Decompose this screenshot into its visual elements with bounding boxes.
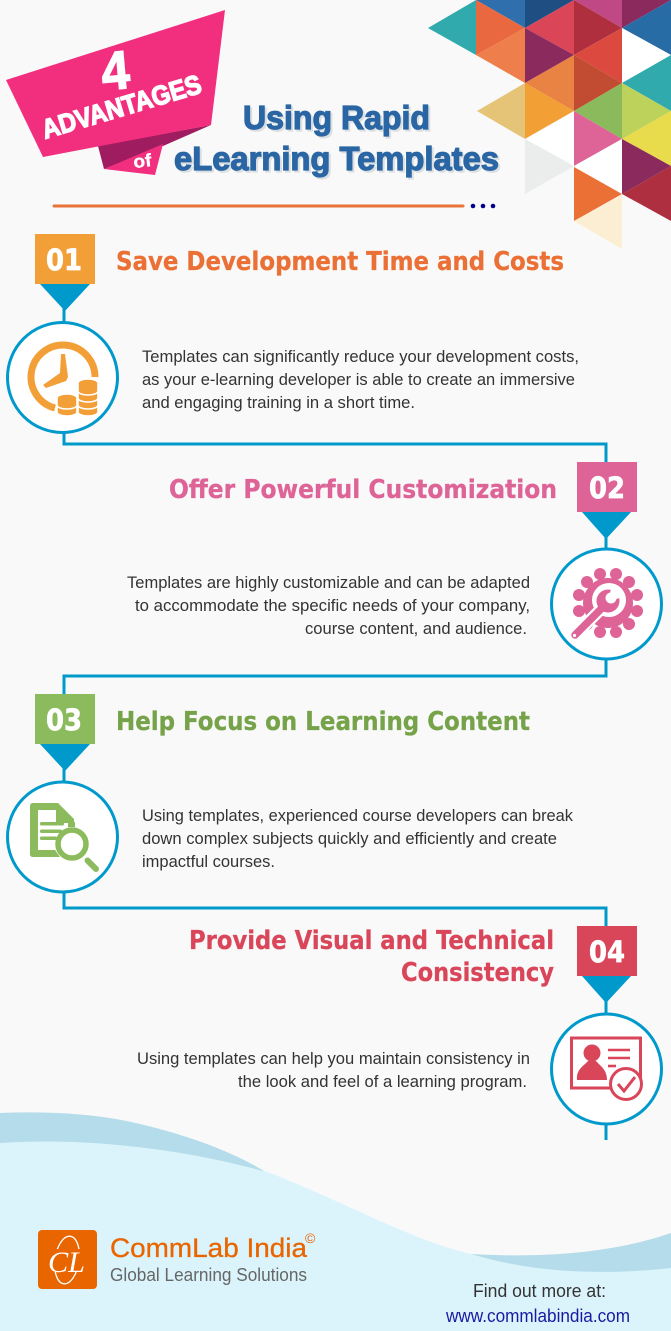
step 4 — [137, 926, 662, 1124]
number badge 03 — [35, 694, 95, 771]
find out more: www.commlabindia.com — [445, 1306, 630, 1326]
title: eLearning Templates — [176, 142, 501, 179]
title — [174, 99, 501, 179]
body text 4 — [137, 1049, 530, 1091]
icon: id card with check — [552, 1014, 662, 1124]
body text 4: the look and feel of a learning program. — [238, 1072, 527, 1091]
number badge 01 — [35, 234, 95, 311]
body text 3: down complex subjects quickly and efficiently and create — [142, 829, 557, 848]
body text 3 — [142, 806, 573, 871]
timeline connector — [64, 300, 606, 1140]
number badge 04 — [577, 926, 637, 1003]
title: Using Rapid — [243, 99, 430, 136]
number badge 02: 02 — [589, 471, 625, 505]
numeral 4: 4 — [99, 40, 132, 102]
banner main — [6, 10, 225, 157]
banner: 4 advantages of — [6, 10, 225, 175]
number badge 04: 04 — [589, 935, 625, 969]
heading 4: Provide Visual and Technical — [189, 926, 554, 956]
step 1 — [8, 234, 579, 432]
title divider with dots — [54, 204, 495, 208]
number badge 01: 01 — [46, 243, 82, 277]
heading 3: Help Focus on Learning Content — [116, 707, 530, 737]
body text 3: Using templates, experienced course developers can break — [142, 806, 573, 825]
body text 1: Templates can significantly reduce your development costs, — [142, 347, 579, 366]
body text 2: Templates are highly customizable and can be adapted — [127, 573, 530, 592]
icon: clock and coins — [8, 322, 118, 432]
logo tagline: Global Learning Solutions — [110, 1265, 307, 1285]
number badge 03: 03 — [46, 703, 82, 737]
logo mark: CL — [48, 1246, 85, 1279]
heading 4 — [189, 926, 554, 988]
banner tail — [104, 144, 163, 175]
heading 4: Consistency — [401, 958, 554, 988]
body text 2: course content, and audience. — [305, 619, 527, 638]
body text 1: and engaging training in a short time. — [142, 393, 415, 412]
icon: gear and wrench — [552, 549, 662, 659]
logo: CommLab India — [38, 1230, 316, 1289]
heading 1: Save Development Time and Costs — [116, 247, 564, 277]
title: Using Rapid — [245, 101, 432, 138]
body text 1: as your e-learning developer is able to create an immersive — [142, 370, 575, 389]
decorative triangle mosaic — [428, 0, 671, 249]
number badge 02 — [577, 462, 637, 539]
word advantages: ADVANTAGES — [38, 69, 205, 145]
body text 4: Using templates can help you maintain consistency in — [137, 1049, 530, 1068]
word of: of — [132, 150, 153, 172]
banner fold — [98, 125, 211, 169]
footer wave background — [0, 1112, 671, 1331]
body text 1 — [142, 347, 579, 412]
heading 2: Offer Powerful Customization — [169, 475, 557, 505]
body text 2: to accommodate the specific needs of your company, — [135, 596, 530, 615]
icon: document and magnifier — [8, 782, 118, 892]
body text 3: impactful courses. — [142, 852, 275, 871]
step 3 — [8, 694, 573, 892]
find out more: Find out more at: — [473, 1281, 606, 1301]
find out more — [445, 1281, 630, 1326]
logo mark — [38, 1230, 97, 1289]
title: eLearning Templates — [174, 140, 499, 177]
copyright mark: © — [305, 1230, 316, 1246]
logo name: CommLab India — [110, 1233, 308, 1263]
body text 2 — [127, 573, 530, 638]
step 2 — [127, 462, 662, 659]
